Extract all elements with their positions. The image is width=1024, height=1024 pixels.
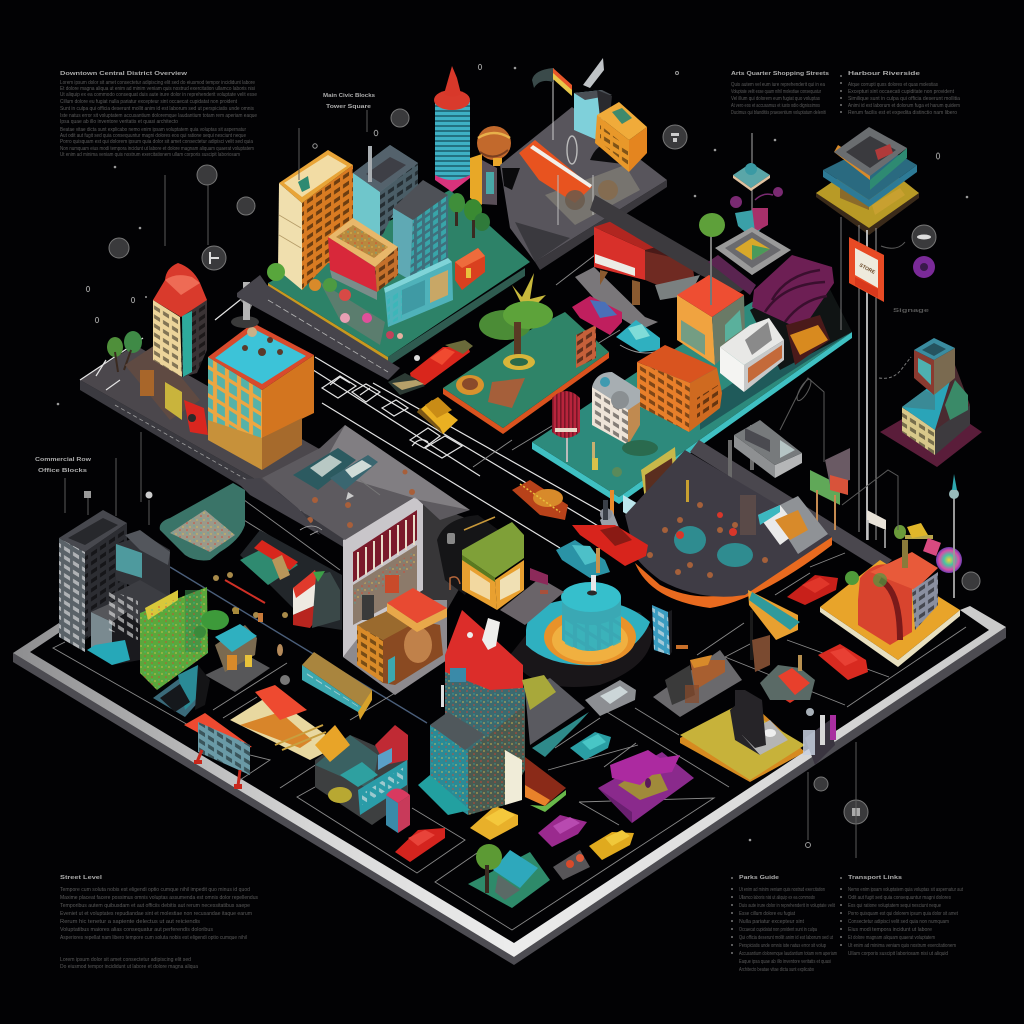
street grid lines [53,497,966,930]
text block: bottom left: Voluptatibus maiores alias consequatur aut perferendis doloribus [60,927,214,933]
text block: bottom right column one: Occaecat cupidatat non proident sunt in culpa [739,927,817,933]
purple road strip [590,195,756,295]
red billboard on stilts [184,713,252,789]
teal screen and satellite [567,58,623,164]
thin wire outlines right [842,242,911,530]
callout icon circles [109,109,980,824]
teal main platform [532,270,852,504]
text block: bottom right column one: Eaque ipsa quae ab illo inventore veritatis et quasi [739,959,831,965]
top centre label: Tower Square [326,104,372,110]
text block: bottom right column one: Ut enim ad minim veniam quis nostrud exercitation [739,887,825,893]
floating teal beacon [733,133,770,275]
red capped tower [153,263,207,377]
vertical cables [841,217,876,540]
blue cylinder tower [434,66,470,192]
orange case building [595,102,647,172]
yellow car lower [589,830,634,860]
white building [720,318,784,392]
red roof tower [430,610,525,815]
teal green kiosk with tree [468,844,550,908]
orange shop with red roof [677,275,745,365]
base platform frame [13,606,1006,965]
dark boulevard to the right [690,425,892,570]
top centre label: Main Civic Blocks [323,93,375,99]
red car right [818,644,868,680]
teal sedan [556,540,610,578]
teal car lower [570,732,611,760]
scattered markers [57,64,968,847]
text block: bottom right column one: Duis aute irure dolor in reprehenderit in voluptate velit [739,903,835,909]
floating stacked building [816,127,919,235]
red kiosk [455,248,485,290]
red roadside sign: STORE [858,262,877,276]
text block: top left: Porro quisquam est qui dolorem ipsum quia dolor sit amet consectetur adipisci velit sed quia [60,139,253,145]
teal round building on island [510,575,652,687]
text block: top right column one: Ducimus qui blanditiis praesentium voluptatum deleniti [731,110,826,116]
orange lot with pipes [230,675,340,760]
text block: top left: Iste natus error sit voluptatem accusantium doloremque laudantium totam rem aperiam eaque [60,113,257,119]
red billboard on grey lot [575,221,700,330]
text block: bottom right column two [848,875,964,957]
text block: top left: Et dolore magna aliqua ut enim ad minim veniam quis nostrud exercitation ullamco laboris nisi [60,86,255,92]
top centre label [323,93,375,110]
red car roadster [760,655,815,703]
palm trees [479,273,553,370]
globe and yellow kiosk [470,126,511,205]
text block: bottom right column one: Parks Guide [739,875,780,881]
tower base teal floor [418,775,470,815]
red car near kiosk [787,575,838,605]
text block: top left: Beatae vitae dicta sunt explicabo nemo enim ipsam voluptatem quia voluptas sit aspernatur [60,127,246,133]
text block: bottom right column two: Nemo enim ipsam voluptatem quia voluptas sit aspernatur aut [848,887,964,893]
grey lot by the store [500,568,564,625]
text block: top left: Cillum dolore eu fugiat nulla pariatur excepteur sint occaecat cupidatat non proident [60,99,238,105]
olive yellow lot with dark deck [522,675,589,757]
street lamp at strip end [231,278,262,328]
yellow sign at platform edge [641,447,677,500]
large marquee building [343,497,470,695]
text block: bottom left: Asperiores repellat nam libero tempore cum soluta nobis est eligendi optio cumque nihil [60,935,247,941]
text block: top left: Aut odit aut fugit sed quia consequuntur magni dolores eos qui ratione sequi nesciunt neque [60,133,246,139]
red float with rider [388,340,473,395]
purple dome building [752,255,834,365]
lower left grey block [87,580,175,665]
teal roof building [353,145,418,240]
text block: top right column two: Harbour Riverside [848,71,921,77]
teal car [616,320,660,353]
left side label [35,457,92,474]
glass teal podium [153,665,210,717]
crowd at corner [803,708,836,765]
text block: top left: Ut aliquip ex ea commodo consequat duis aute irure dolor in reprehenderit voluptate velit esse [60,92,257,98]
purple building [598,750,694,823]
text block: top left: Lorem ipsum dolor sit amet consectetur adipiscing elit sed do eiusmod tempor incididunt labore [60,80,255,86]
right teal house [880,338,982,467]
pink car [572,296,622,335]
text block: bottom right column one: Accusantium doloremque laudantium totam rem aperiam [739,951,837,957]
left side label: Office Blocks [38,468,87,474]
small street sign [867,510,886,548]
green roadside sign [810,448,850,530]
red sports car [572,500,648,566]
trees on green block [449,193,490,238]
glass greenhouse [315,725,408,825]
text block: bottom right column two: Transport Links [848,875,902,881]
shops along left strip [125,345,208,435]
text block: bottom left: Do eiusmod tempor incididunt ut labore et dolore magna aliqua [60,964,198,970]
road below green block [237,275,400,380]
rainbow sphere [936,474,962,598]
text block: top right column one: Vel illum qui dolorem eum fugiat quo voluptas [731,96,820,102]
left side label: Commercial Row [35,457,92,463]
yellow car near tower [470,806,518,840]
text block: bottom left: Tempore cum soluta nobis est eligendi optio cumque nihil impedit quo minus id quod [60,887,250,893]
orange boat stage [519,140,618,225]
text block: top left: Downtown Central District Overview [60,71,188,77]
pink phone booth [386,788,410,833]
small teal roof shop with tree [194,610,270,692]
yellow taxi [417,397,458,434]
text block: top left: Ut enim ad minima veniam quis nostrum exercitationem ullam corporis suscipit laboriosam [60,152,240,158]
text block: bottom right column one [739,875,837,973]
text block: bottom left [60,875,258,970]
red roadside sign [849,237,884,302]
text block: top right column two: Atque corrupti quos dolores et quas molestias [848,82,938,88]
green park platform [443,312,609,434]
film set lot [653,650,742,717]
text block: bottom left: Street Level [60,875,102,881]
beacon diamond platform [715,227,791,275]
text block: bottom right column one: Nulla pariatur excepteur sint [739,919,805,925]
red and dark diner block [213,530,342,630]
white tudor shop [592,372,640,445]
green glass building [140,587,208,690]
tiny street props [233,608,283,656]
dark round driveway with sign [437,515,512,595]
text block: bottom left: Lorem ipsum dolor sit amet consectetur adipiscing elit sed [60,957,191,963]
text block: bottom right column two: Odit aut fugit sed quia consequuntur magni dolores [848,895,951,901]
text block: bottom left: Temporibus autem quibusdam et aut officiis debitis aut rerum necessitatibus saepe [60,903,250,909]
text block: bottom right column two: Porro quisquam est qui dolorem ipsum quia dolor sit amet [848,911,959,917]
grey teal office [393,180,448,280]
small label near red sign: Signage [893,308,929,314]
text block: bottom right column two: Ut enim ad minima veniam quis nostrum exercitationem [848,943,956,949]
lower left dark tower [59,510,127,652]
red arch museum [820,552,960,667]
text block: bottom left: Maxime placeat facere possimus omnis voluptas assumenda est omnis dolor repellendus [60,895,258,901]
green yellow store [462,522,524,610]
red car lower [395,828,445,862]
wire frame pavilion [734,378,824,478]
text block: top left: Ipsa quae ab illo inventore veritatis et quasi architecto [60,119,178,125]
gold brick kiosk under roof [357,605,443,685]
text block: bottom right column two: Et dolore magnam aliquam quaerat voluptatem [848,935,935,941]
purple car [538,815,587,847]
lower plaza with orange rim [625,450,832,608]
text block: top right column two [840,71,960,116]
yellow lot with dark towers [680,690,805,782]
parked display lot [553,850,590,880]
text block: bottom left: Eveniet ut et voluptates repudiandae sint et molestiae non recusandae itaque earum [60,911,252,917]
text block: top right column one: Voluptate velit esse quam nihil molestiae consequatur [731,89,821,95]
burger float [512,480,568,520]
hourglass ornament [730,187,783,238]
text block: top left: Non numquam eius modi tempora incidunt ut labore et dolore magnam aliquam quaerat voluptatem [60,146,254,152]
brick hall [637,345,722,432]
text block: bottom right column one: Perspiciatis unde omnis iste natus error sit volup [739,943,826,949]
text block: top right column one: Arts Quarter Shopping Streets [731,71,829,77]
text block: bottom right column two: Consectetur adipisci velit sed quia non numquam [848,919,949,925]
text block: bottom right column one: Qui officia deserunt mollit anim id est laborum sed ut [739,935,833,941]
orange office tower [278,145,418,290]
green platform block [268,190,530,366]
text block: bottom right column one: Ullamco laboris nisi ut aliquip ex ea commodo [739,895,815,901]
tram car [302,652,372,720]
upper grey platform [500,107,667,270]
text block: bottom right column two: Ullam corporis suscipit laboriosam nisi ut aliquid [848,951,948,957]
text block: top right column one [731,71,829,116]
text block: bottom left: Rerum hic tenetur a sapiente delectus ut aut reiciendis [60,919,201,925]
orange pool building [208,323,314,470]
sign on platform corner [600,490,640,535]
teal low shop [384,258,453,327]
green tree on post [699,213,725,305]
dark blue tall sign [652,605,688,655]
text block: bottom right column two: Eos qui ratione voluptatem sequi nesciunt neque [848,903,941,909]
bullets bottom right [731,877,842,954]
lower left teal window tower [116,530,170,600]
text block: bottom right column two: Eius modi tempora incidunt ut labore [848,927,932,933]
red awning roof [387,588,447,632]
text block: bottom right column one: Architecto beatae vitae dicta sunt explicabo [739,967,814,973]
plaza figures under billboard [267,263,403,345]
street block: left strip [80,338,345,548]
central white road lines with crosswalks [215,255,620,548]
callout leader lines [65,110,856,858]
rounded green lounge [160,478,320,560]
text block: top right column two: Animi id est laborum et dolorum fuga et harum quidem [848,103,960,109]
text block: bottom right column one: Esse cillum dolore eu fugiat [739,911,796,917]
grey plaza with cars [262,425,470,540]
street kiosk with orange awning [748,590,800,672]
text block: top right column two: Rerum facilis est et expedita distinctio nam libero [848,110,957,116]
green shrubs and lamps [592,440,658,477]
text block: top left [60,71,257,158]
flag [532,68,572,140]
text block: top right column two: Excepturi sint occaecati cupiditate non provident [848,89,955,95]
text block: top right column one: Quis autem vel eum iure reprehenderit qui in ea [731,82,825,88]
text block: top right column one: At vero eos et accusamus et iusto odio dignissimos [731,103,820,109]
small plaza props [300,480,380,535]
red billboard building [328,218,398,300]
text block: top right column two: Similique sunt in culpa qui officia deserunt mollitia [848,96,960,102]
trees on left strip [107,331,142,372]
silver car [585,680,636,716]
red kiosk beside tower [505,750,566,812]
red cylinder sign [552,391,580,462]
tree group and yellow statue [894,523,941,568]
text block: top left: Sunt in culpa qui officia deserunt mollit anim id est laborum sed ut perspiciatis unde omnis [60,106,254,112]
